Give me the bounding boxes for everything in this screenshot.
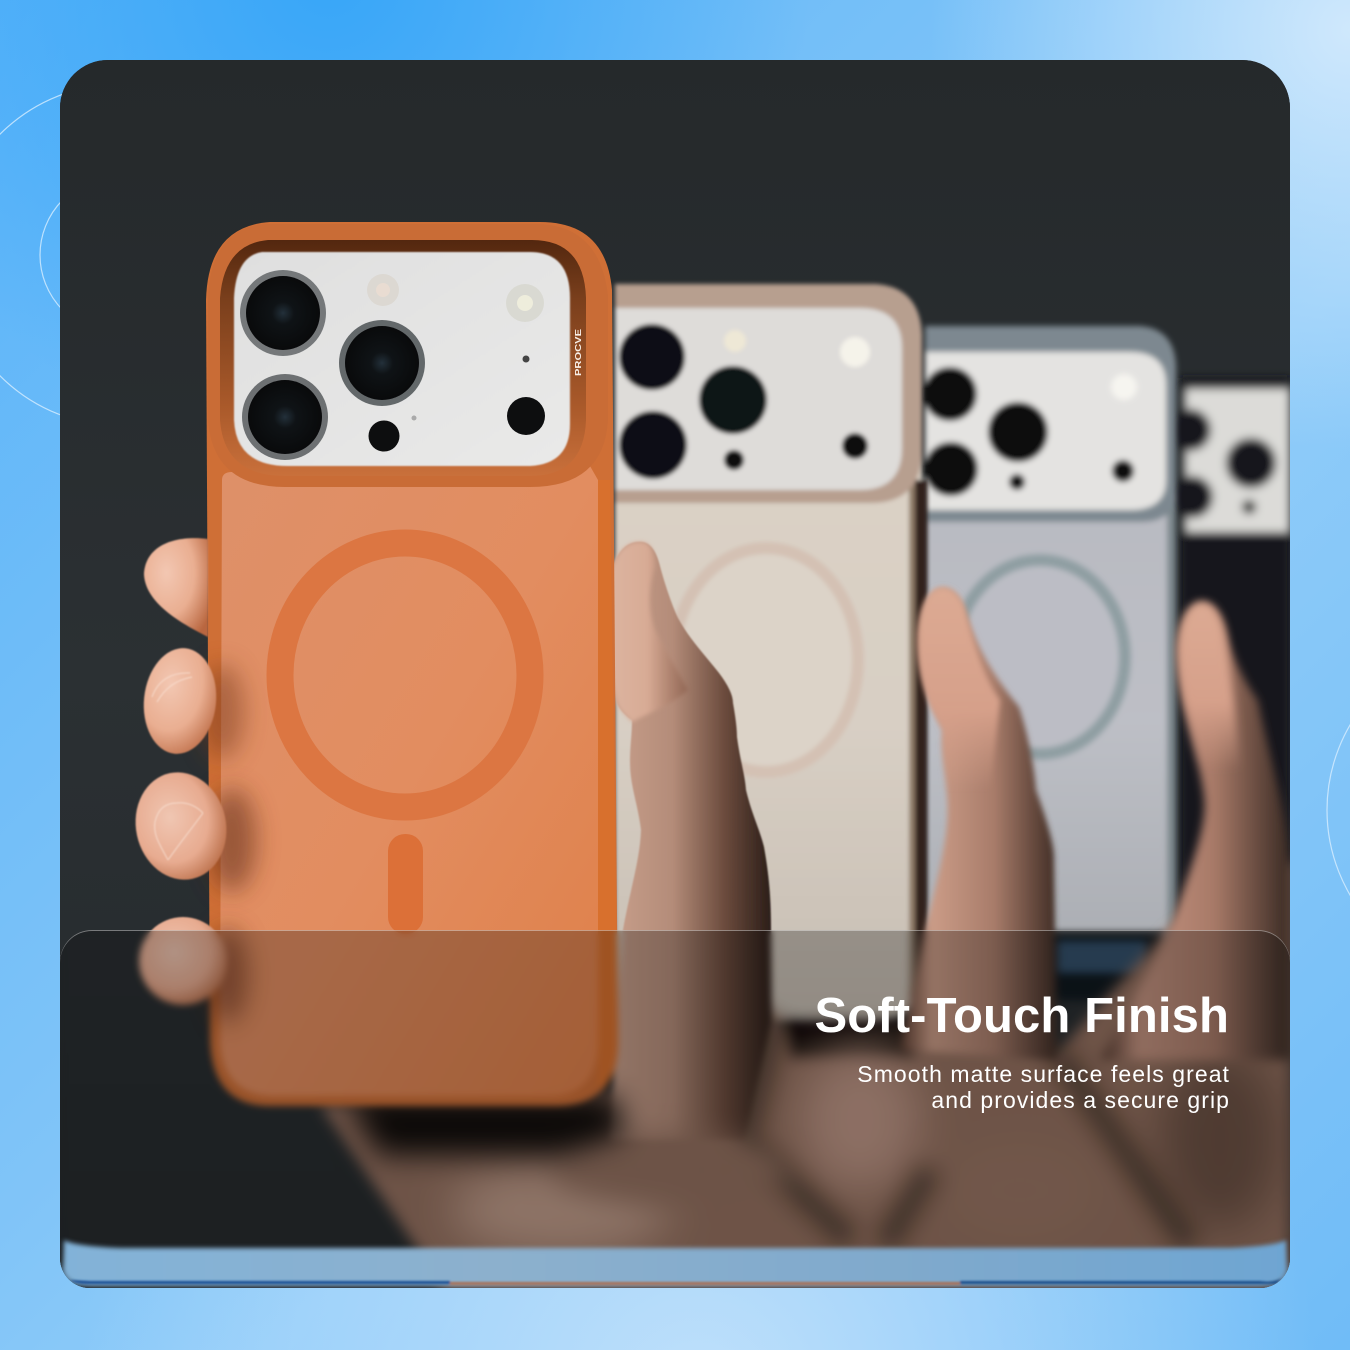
- camera plate: [234, 252, 570, 466]
- phone 1: orange: [200, 222, 618, 1106]
- camera frame outer rim: [208, 224, 608, 487]
- camera frame inner channel: [220, 240, 586, 476]
- phone 4: [1169, 378, 1290, 960]
- logo on frame: PROCVE: [573, 329, 583, 376]
- palm of hand: [320, 860, 1290, 1290]
- left fingers: [126, 538, 236, 1005]
- magsafe ring: [280, 543, 530, 807]
- shadow of fingers on body: [200, 664, 244, 760]
- phone 3: [923, 326, 1176, 1000]
- lenses: [240, 270, 326, 356]
- phone 2: [615, 284, 927, 1022]
- finger 3: [900, 588, 1057, 1060]
- glass overlay panel: [60, 930, 1290, 1288]
- description text: and provides a secure grip: [931, 1087, 1230, 1113]
- phone 1 body: [206, 222, 618, 1106]
- finger 4: [1100, 603, 1290, 1060]
- hand highlights and shadows: [450, 1020, 1280, 1255]
- description text: Smooth matte surface feels great: [857, 1061, 1230, 1087]
- glass bottom reflection strip: [60, 1238, 1290, 1288]
- thumb base blending into palm: [550, 1136, 790, 1204]
- description text: [857, 1061, 1230, 1113]
- shadow beneath orange phone: [345, 1095, 625, 1155]
- heading: Soft-Touch Finish: [814, 989, 1229, 1043]
- finger 2: thumb: [606, 542, 772, 1140]
